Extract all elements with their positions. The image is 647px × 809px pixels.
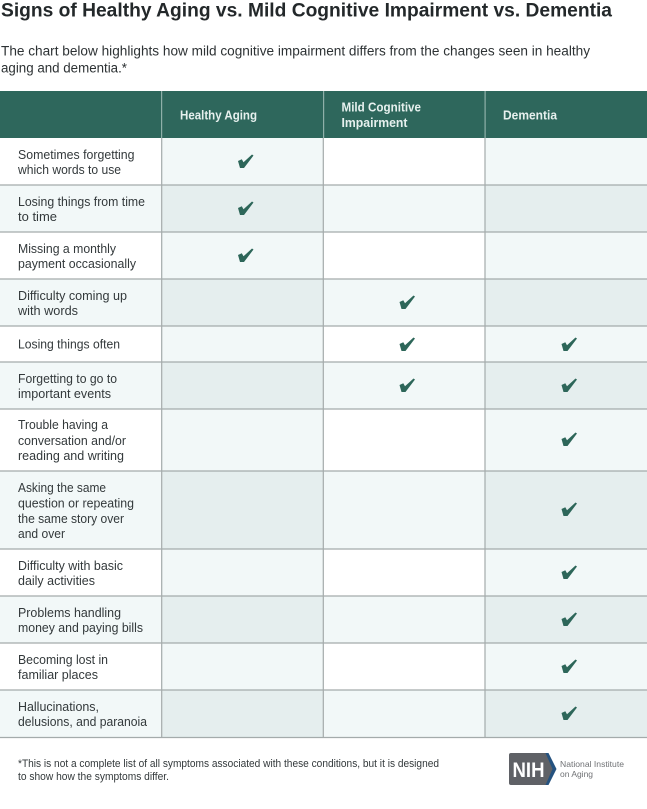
icon: NIH badge: NIH [512,759,544,782]
row: Missing a monthly payment occasionally: Missing a monthly [18,241,117,256]
row: Sometimes forgetting which words to use [0,138,647,185]
row: Difficulty coming up with words [0,279,647,326]
row: Asking the same question or repeating the same story over and over: and over [18,526,66,541]
row: Forgetting to go to important events [0,362,647,409]
footnote [18,758,439,783]
row: Difficulty with basic daily activities: Difficulty with basic [18,558,124,573]
row: Losing things from time to time: to time [18,209,57,224]
row: Losing things from time to time: Losing things from time [18,194,145,209]
row: Becoming lost in familiar places: familiar places [18,667,98,682]
row: Hallucinations, delusions, and paranoia [0,690,647,737]
row: Asking the same question or repeating the same story over and over [0,471,647,549]
row: Asking the same question or repeating the same story over and over: question or repeating [18,496,134,510]
table header row: Dementia [503,108,558,122]
logo: NIH National Institute on Aging [509,753,624,785]
row: Trouble having a conversation and/or reading and writing [0,409,647,471]
intro text block: The chart below highlights how mild cognitive impairment differs from the changes seen in healthy [1,44,591,60]
row: Difficulty coming up with words: with words [17,303,78,318]
row: Problems handling money and paying bills: Problems handling [18,605,121,620]
intro text block [1,44,591,76]
table header row: Healthy Aging [180,108,257,122]
table header row: Impairment [342,116,408,130]
row: Sometimes forgetting which words to use: Sometimes forgetting [18,147,134,162]
row: Losing things often: Losing things often [18,336,120,352]
row: Missing a monthly payment occasionally: payment occasionally [18,256,137,271]
logo: NIH National Institute on Aging: on Aging [560,769,593,779]
row: Difficulty with basic daily activities [0,549,647,596]
row: Trouble having a conversation and/or reading and writing: reading and writing [18,448,124,463]
row: Forgetting to go to important events: Forgetting to go to [18,371,117,386]
table header row: Mild Cognitive [342,100,421,114]
footnote: *This is not a complete list of all symptoms associated with these conditions, but it is designed [18,758,439,770]
row: Problems handling money and paying bills: money and paying bills [18,620,143,635]
row: Forgetting to go to important events: important events [18,386,111,401]
logo: NIH National Institute on Aging: National Institute [560,759,624,769]
row: Problems handling money and paying bills [0,596,647,643]
row: Becoming lost in familiar places: Becoming lost in [18,652,108,667]
intro text block: aging and dementia.* [1,60,127,76]
row: Missing a monthly payment occasionally [0,232,647,279]
row: Hallucinations, delusions, and paranoia: Hallucinations, [18,699,99,714]
row: Losing things often [0,326,647,362]
row: Losing things from time to time [0,185,647,232]
footnote: to show how the symptoms differ. [18,771,169,783]
row: Becoming lost in familiar places [0,643,647,690]
title: Signs of Healthy Aging vs. Mild Cognitive Impairment vs. Dementia [1,0,613,22]
row: Asking the same question or repeating the same story over and over: the same story over [18,511,125,526]
row: Sometimes forgetting which words to use: which words to use [17,162,121,177]
table header row [0,91,647,138]
row: Difficulty with basic daily activities: daily activities [18,573,95,588]
comparison table [0,91,647,738]
row: Hallucinations, delusions, and paranoia: delusions, and paranoia [18,714,148,729]
row: Difficulty coming up with words: Difficulty coming up [18,288,127,303]
row: Trouble having a conversation and/or reading and writing: Trouble having a [18,417,109,432]
row: Asking the same question or repeating the same story over and over: Asking the same [18,480,106,495]
row: Trouble having a conversation and/or reading and writing: conversation and/or [18,433,127,448]
